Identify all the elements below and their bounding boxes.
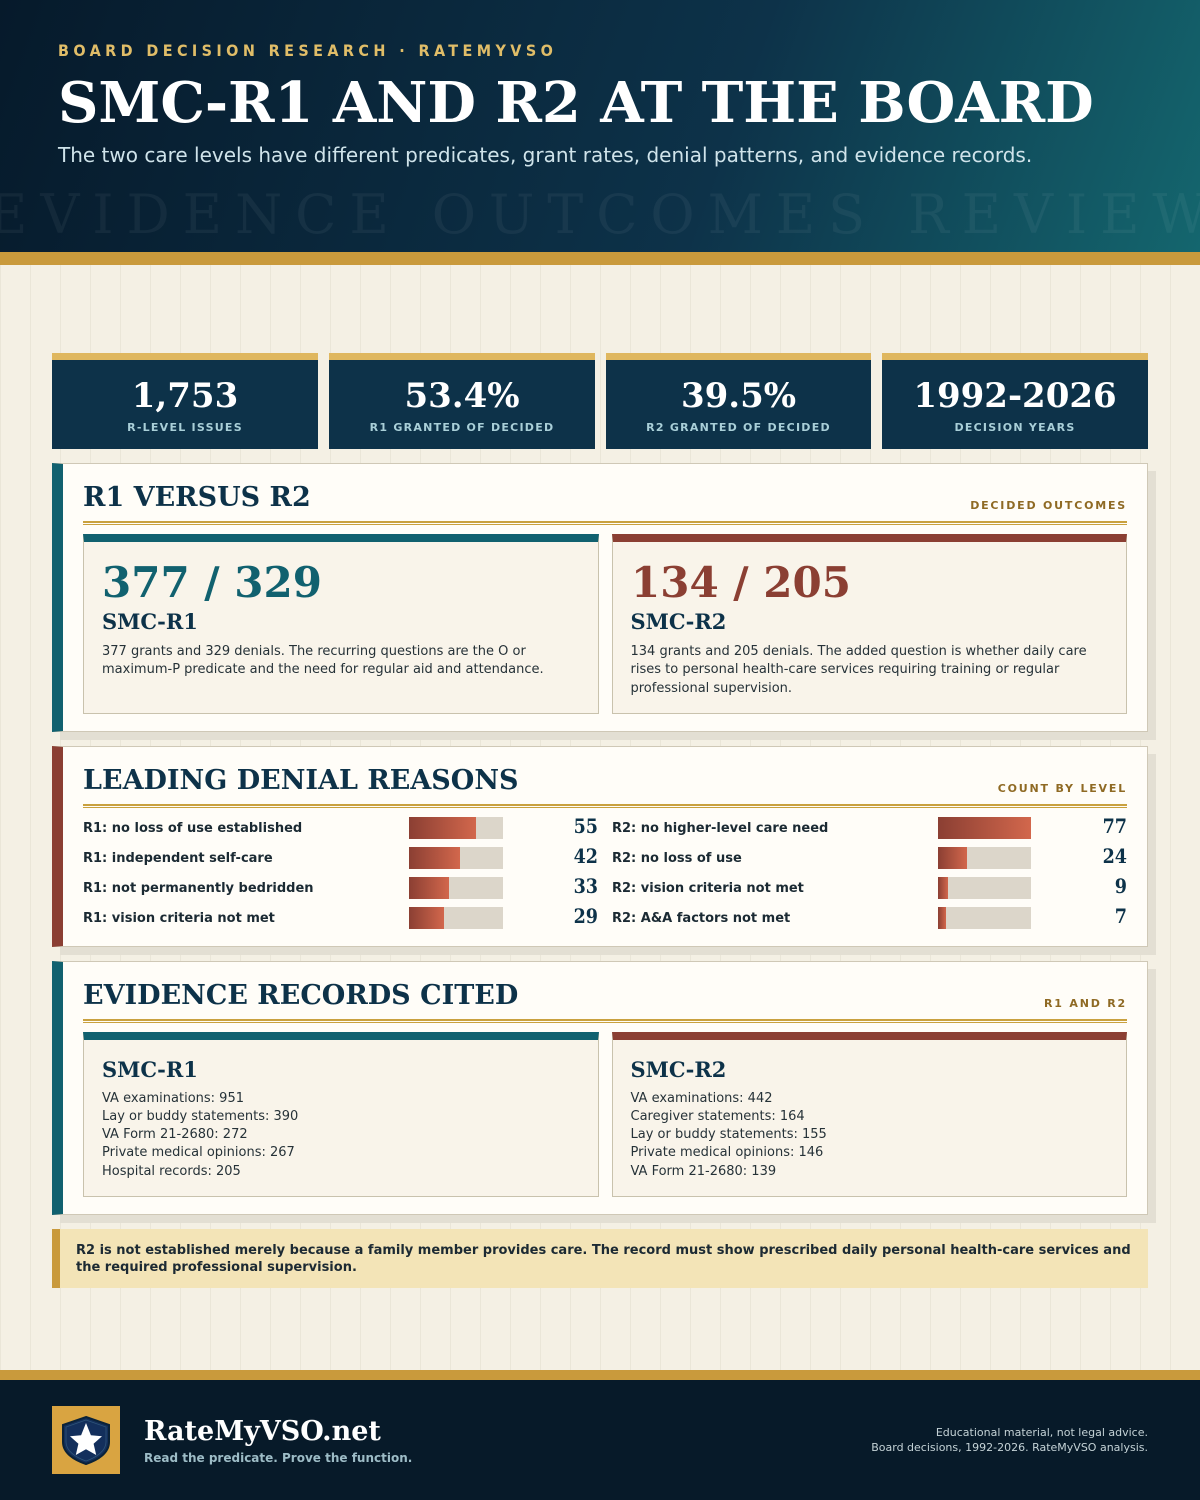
evidence list: VA examinations: 442	[630, 1090, 772, 1106]
R1 value: 29	[574, 905, 598, 928]
panel: evidence records cited	[52, 961, 1148, 1215]
icon: shield logo	[52, 1406, 120, 1474]
R1 value: 55	[574, 815, 598, 838]
description: professional supervision.	[630, 681, 792, 696]
R2 bar	[938, 847, 1031, 869]
evidence list: Lay or buddy statements: 155	[630, 1127, 827, 1142]
stat: R-level issues	[52, 353, 318, 449]
big number: 134 / 205	[631, 558, 851, 607]
tag: R1 AND R2	[1044, 997, 1127, 1010]
R1 bar	[409, 877, 503, 899]
gold footer rule	[0, 1370, 1200, 1380]
description: maximum-P predicate and the need for regular aid and attendance.	[102, 662, 544, 677]
R2 bar	[938, 907, 1031, 929]
evidence list: Private medical opinions: 146	[630, 1145, 823, 1160]
panel: R1 versus R2	[52, 463, 1148, 732]
stat: R1 granted: R1 GRANTED OF DECIDED	[370, 421, 554, 434]
panel: leading denial reasons	[52, 746, 1148, 947]
evidence list: Caregiver statements: 164	[630, 1109, 805, 1124]
evidence list: Lay or buddy statements: 390	[102, 1109, 298, 1124]
brand name: RateMyVSO.net	[144, 1416, 381, 1447]
gold header rule	[0, 252, 1200, 265]
stat: R2 granted: R2 GRANTED OF DECIDED	[646, 421, 831, 434]
evidence list: Private medical opinions: 267	[102, 1145, 295, 1160]
card: SMC-R2 evidence	[612, 1032, 1127, 1197]
R1 value: 42	[574, 845, 598, 868]
big number: 377 / 329	[102, 558, 322, 607]
R2 value: 77	[1103, 815, 1127, 838]
evidence list	[102, 1090, 298, 1179]
page background grid	[0, 265, 1200, 1370]
stat: R1 granted: 53.4%	[404, 376, 520, 416]
callout: R2 is not established merely because a family member provides care. The record must show prescribed daily personal health-care services and	[76, 1243, 1131, 1258]
disclaimer: Educational material, not legal advice.	[936, 1426, 1148, 1439]
footer band	[0, 1380, 1200, 1500]
header band	[0, 0, 1200, 252]
R1 row label: R1: vision criteria not met	[83, 911, 275, 926]
evidence list: VA Form 21-2680: 139	[630, 1164, 776, 1179]
R2 row label: R2: vision criteria not met	[612, 881, 804, 896]
subtitle: The two care levels have different predicates, grant rates, denial patterns, and evidence records.	[58, 143, 1032, 167]
stat: R2 granted	[606, 353, 871, 449]
R2 row label: R2: no higher-level care need	[612, 821, 828, 836]
eyebrow: BOARD DECISION RESEARCH · RATEMYVSO	[58, 41, 557, 60]
heading: LEADING DENIAL REASONS	[83, 765, 518, 796]
card: SMC-R2 outcomes	[612, 534, 1127, 714]
evidence list: Hospital records: 205	[102, 1164, 241, 1179]
disclaimer	[871, 1426, 1148, 1454]
callout: the required professional supervision.	[76, 1260, 357, 1275]
title: SMC-R1 AND R2 AT THE BOARD	[58, 70, 1094, 136]
card heading: SMC-R2	[630, 1057, 726, 1082]
R2 value: 9	[1115, 875, 1127, 898]
R2 value: 24	[1103, 845, 1127, 868]
R2 row label: R2: no loss of use	[612, 851, 742, 866]
R1 bar	[409, 907, 503, 929]
R2 bar	[938, 817, 1031, 839]
card: SMC-R1 evidence	[83, 1032, 599, 1197]
card heading: SMC-R2	[630, 609, 726, 634]
denial rows	[83, 815, 1127, 929]
tag: DECIDED OUTCOMES	[970, 499, 1127, 512]
stat: decision years: 1992-2026	[913, 376, 1117, 416]
evidence list	[630, 1090, 827, 1179]
evidence list: VA examinations: 951	[102, 1090, 244, 1106]
stat: decision years	[882, 353, 1148, 449]
stat: R-level issues: R-LEVEL ISSUES	[127, 421, 243, 434]
callout	[52, 1229, 1148, 1288]
tagline: Read the predicate. Prove the function.	[144, 1451, 412, 1465]
R2 row label: R2: A&A factors not met	[612, 911, 790, 926]
R2 bar	[938, 877, 1031, 899]
card heading: SMC-R1	[102, 1057, 198, 1082]
R1 row label: R1: not permanently bedridden	[83, 881, 314, 896]
R2 value: 7	[1115, 905, 1127, 928]
R1 bar	[409, 817, 503, 839]
stat: decision years: DECISION YEARS	[954, 421, 1076, 434]
card: SMC-R1 outcomes	[83, 534, 599, 714]
R1 row label: R1: independent self-care	[83, 851, 273, 866]
heading: EVIDENCE RECORDS CITED	[83, 980, 518, 1011]
R1 value: 33	[574, 875, 598, 898]
description	[102, 644, 544, 677]
stat: R2 granted: 39.5%	[681, 376, 796, 416]
tag: COUNT BY LEVEL	[998, 782, 1127, 795]
R1 bar	[409, 847, 503, 869]
card heading: SMC-R1	[102, 609, 198, 634]
stat: R1 granted	[329, 353, 595, 449]
description	[630, 644, 1087, 696]
watermark: EVIDENCE OUTCOMES REVIEW	[0, 183, 1200, 246]
description: rises to personal health-care services requiring training or regular	[630, 662, 1059, 677]
stat: R-level issues: 1,753	[132, 376, 238, 416]
evidence list: VA Form 21-2680: 272	[102, 1127, 248, 1142]
R1 row label: R1: no loss of use established	[83, 821, 302, 836]
description: 377 grants and 329 denials. The recurring questions are the O or	[102, 644, 526, 659]
disclaimer: Board decisions, 1992-2026. RateMyVSO analysis.	[871, 1441, 1148, 1454]
description: 134 grants and 205 denials. The added question is whether daily care	[630, 644, 1087, 659]
heading: R1 VERSUS R2	[83, 482, 311, 513]
